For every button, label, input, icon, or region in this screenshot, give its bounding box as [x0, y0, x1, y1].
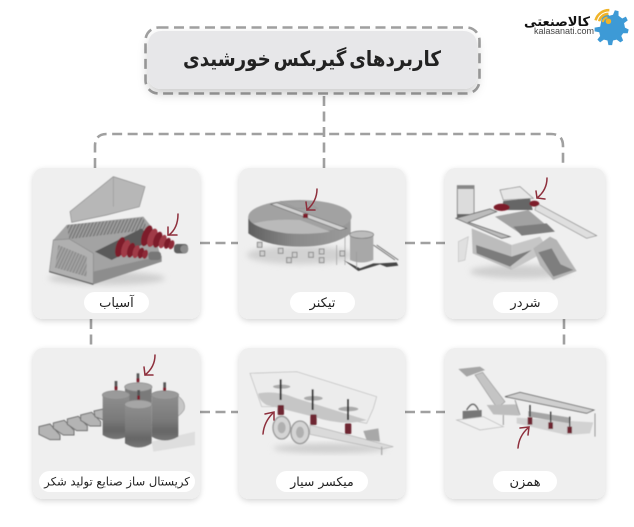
connector lines	[91, 96, 564, 412]
arrow	[263, 412, 274, 434]
label pill	[493, 292, 558, 313]
label pill	[84, 292, 149, 313]
grinder rotors	[113, 224, 188, 265]
logo domain: kalasanati.com	[534, 26, 594, 36]
panel: homogenizer	[445, 348, 605, 499]
crystallizer illustration	[39, 373, 195, 452]
panel: grinder	[33, 168, 200, 319]
homogenizer illustration	[457, 367, 595, 437]
title: کاربردهای گیربکس خورشیدی	[183, 46, 442, 71]
arrow	[536, 178, 547, 199]
title box	[146, 28, 480, 94]
panel: thickener	[239, 168, 405, 319]
grinder machine illustration	[48, 177, 188, 285]
label pill: شردر	[509, 296, 541, 311]
label pill	[493, 471, 557, 492]
label pill	[290, 292, 355, 313]
panel: shredder	[445, 168, 605, 319]
panel: mobile mixer	[239, 348, 405, 499]
logo text: کالاصنعتی	[524, 15, 590, 30]
label pill: میکسر سیار	[289, 474, 354, 490]
shredder illustration	[456, 186, 597, 280]
label pill: تیکنر	[309, 296, 336, 311]
arrow	[306, 189, 317, 210]
panel: sugar crystallizer	[33, 348, 200, 499]
mixer illustration	[250, 372, 393, 455]
icon: gear with signal	[595, 10, 629, 45]
thickener illustration	[247, 200, 398, 271]
label pill	[39, 471, 195, 492]
label pill: آسیاب	[99, 294, 135, 311]
label pill	[276, 471, 368, 492]
logo	[524, 10, 629, 45]
label pill: کریستال ساز صنایع تولید شکر	[43, 474, 190, 490]
arrow	[518, 427, 529, 448]
arrow	[144, 355, 155, 375]
arrow	[168, 214, 178, 235]
label pill: همزن	[509, 475, 541, 490]
